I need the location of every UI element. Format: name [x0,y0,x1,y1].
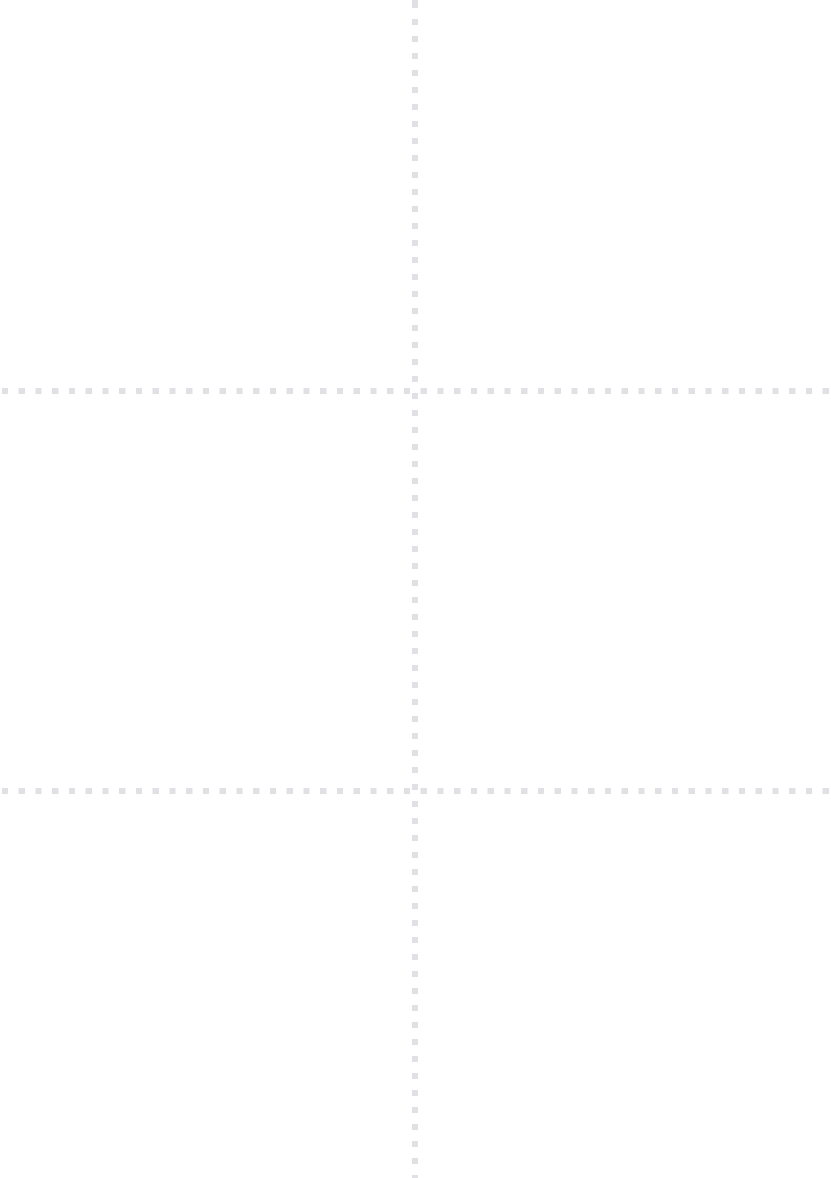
horizontal dotted divider bottom [0,788,831,794]
horizontal dotted divider top [0,388,831,394]
vertical dotted divider [412,0,418,1178]
